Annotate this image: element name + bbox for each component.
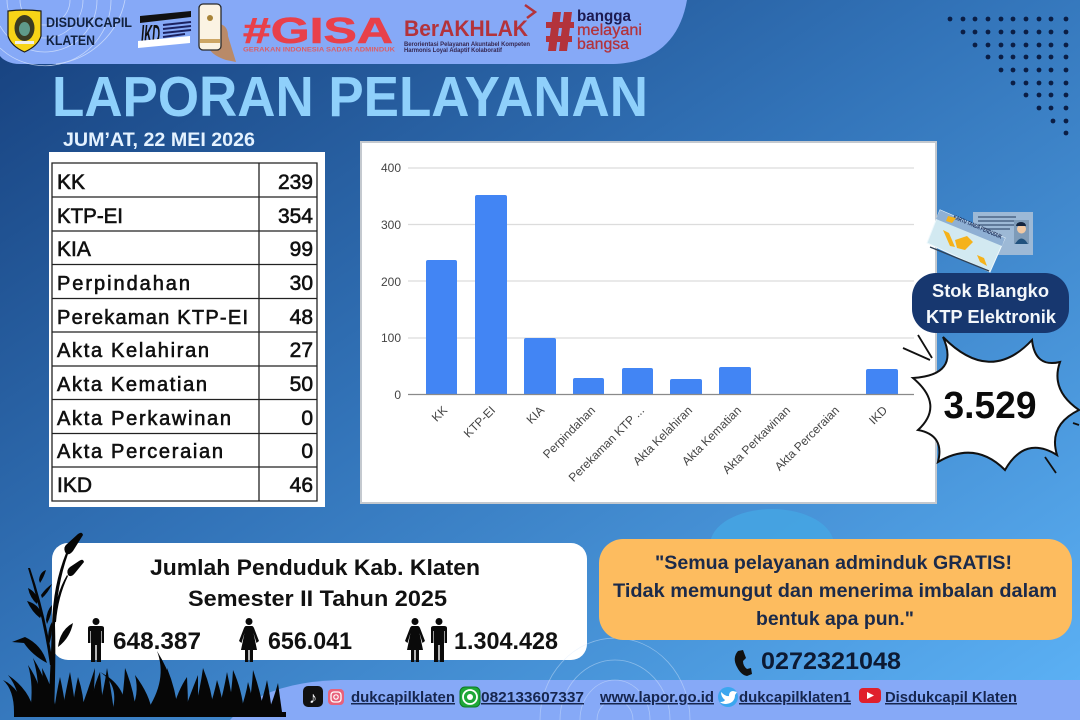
icon: female (239, 618, 259, 662)
label pill: stock: KTP Elektronik (926, 307, 1057, 327)
x axis labels: Akta Perkawinan (720, 403, 793, 477)
x axis labels (429, 403, 890, 485)
cattail stems (48, 553, 68, 712)
panel: service table: 50 (290, 373, 313, 396)
footer links: 082133607337 (481, 689, 584, 706)
panel: service table: KTP-EI (57, 205, 123, 228)
icon: tiktok (303, 686, 323, 707)
x axis labels: Perekaman KTP ... (566, 403, 647, 485)
panel: population: Semester II Tahun 2025 (188, 586, 447, 611)
icon: male (88, 618, 104, 662)
icon: youtube (859, 688, 881, 703)
x axis labels: KTP-EI (461, 403, 498, 440)
dot pattern (948, 17, 1068, 135)
panel: service table: 48 (290, 306, 313, 329)
footer links: dukcapilklaten1 (739, 689, 851, 706)
BerAKHLAK logo (404, 5, 535, 54)
y axis labels: 200 (381, 275, 401, 289)
panel: service table: 30 (290, 272, 313, 295)
icon: whatsapp (460, 687, 480, 707)
panel: population: 656.041 (268, 628, 352, 655)
label pill: stock (912, 273, 1069, 333)
bangga melayani bangsa logo (546, 8, 642, 53)
y axis labels: 0 (394, 388, 401, 402)
panel: population: 1.304.428 (454, 628, 558, 655)
phone contact: 0272321048 (761, 648, 901, 675)
x axis labels: KK (429, 403, 450, 424)
footer links: Disdukcapil Klaten (885, 689, 1017, 706)
panel: population: Jumlah Penduduk Kab. Klaten (150, 555, 480, 580)
panel: service table: 99 (290, 238, 313, 261)
cyan glow behind quote (710, 509, 834, 581)
footer links: www.lapor.go.id (599, 689, 714, 706)
header rings (0, 0, 125, 66)
x axis labels: IKD (866, 403, 890, 427)
panel: service table: 354 (278, 205, 313, 228)
icon: tiktok: ♪ (309, 690, 317, 707)
BerAKHLAK logo: Berorientasi Pelayanan Akuntabel Kompeten (404, 41, 530, 48)
y axis labels (381, 161, 401, 402)
icon: instagram (328, 689, 344, 705)
panel: service table: 46 (290, 474, 313, 497)
bangga melayani bangsa logo: melayani (577, 22, 642, 39)
organisation name (46, 14, 132, 48)
panel: service table: KK (57, 171, 85, 194)
bangga melayani bangsa logo: bangsa (577, 36, 629, 53)
icon: twitter (718, 687, 738, 707)
panel: service table: KIA (57, 238, 91, 261)
footer links (351, 689, 1017, 706)
organisation name: DISDUKCAPIL (46, 14, 132, 30)
footer band (230, 638, 1080, 720)
callout: starburst stock number: 3.529 (944, 385, 1036, 427)
icon: KTP cards: KARTU TANDA PENDUDUK (952, 215, 1003, 241)
x axis labels: Akta Kelahiran (630, 403, 695, 468)
panel: service table: 27 (290, 339, 313, 362)
panel: service table: 239 (278, 171, 313, 194)
icon: KTP cards (927, 210, 1033, 272)
IKD activation badge: IKD (141, 19, 160, 49)
icon: both genders (405, 618, 447, 662)
phone in hand (199, 4, 236, 62)
panel: free service quote: Tidak memungut dan menerima imbalan dalam (613, 581, 1057, 602)
header band (0, 0, 687, 66)
panel: population (52, 543, 587, 662)
y axis labels: 300 (381, 218, 401, 232)
plant silhouette (3, 533, 286, 717)
panel: service table: Akta Kelahiran (57, 340, 209, 362)
panel: population: 648.387 (113, 628, 201, 655)
panel: bar chart (361, 142, 936, 503)
y axis labels: 100 (381, 331, 401, 345)
x axis labels: KIA (524, 403, 547, 427)
x axis labels: Akta Kematian (679, 403, 744, 468)
logo: Klaten shield (8, 10, 41, 52)
panel: service table: Perekaman KTP-EI (57, 307, 248, 329)
panel: service table: Perpindahan (57, 273, 190, 295)
footer links: dukcapilklaten (351, 689, 455, 706)
x axis labels: Perpindahan (540, 403, 598, 461)
bangga melayani bangsa logo: bangga (577, 8, 631, 25)
decorative rings (540, 638, 690, 720)
panel: free service quote: bentuk apa pun." (756, 609, 914, 630)
date: JUM’AT, 22 MEI 2026 (63, 130, 255, 151)
label pill: stock: Stok Blangko (932, 281, 1049, 301)
x axis labels: Akta Perceraian (772, 403, 842, 474)
bars (426, 195, 898, 394)
panel: free service quote (599, 539, 1072, 640)
GISA logo: #GISA (243, 10, 393, 51)
y axis labels: 400 (381, 161, 401, 175)
panel: service table: IKD (57, 474, 92, 497)
panel: service table: Akta Perkawinan (57, 408, 231, 430)
BerAKHLAK logo: BerAKHLAK (404, 16, 528, 41)
panel: service table: Akta Perceraian (57, 441, 223, 463)
panel: service table: 0 (301, 407, 313, 430)
GISA logo: GERAKAN INDONESIA SADAR ADMINDUK (243, 48, 396, 54)
BerAKHLAK logo: Harmonis Loyal Adaptif Kolaboratif (404, 47, 503, 54)
GISA logo (243, 10, 396, 54)
main title: LAPORAN PELAYANAN (52, 65, 648, 129)
organisation name: KLATEN (46, 32, 95, 48)
panel: free service quote: "Semua pelayanan adminduk GRATIS! (655, 553, 1012, 574)
panel: service table (49, 152, 325, 507)
plant leaves (12, 637, 47, 663)
callout: starburst stock number (903, 335, 1079, 473)
IKD activation badge (138, 11, 191, 49)
panel: service table: Akta Kematian (57, 374, 207, 396)
panel: service table: 0 (301, 440, 313, 463)
